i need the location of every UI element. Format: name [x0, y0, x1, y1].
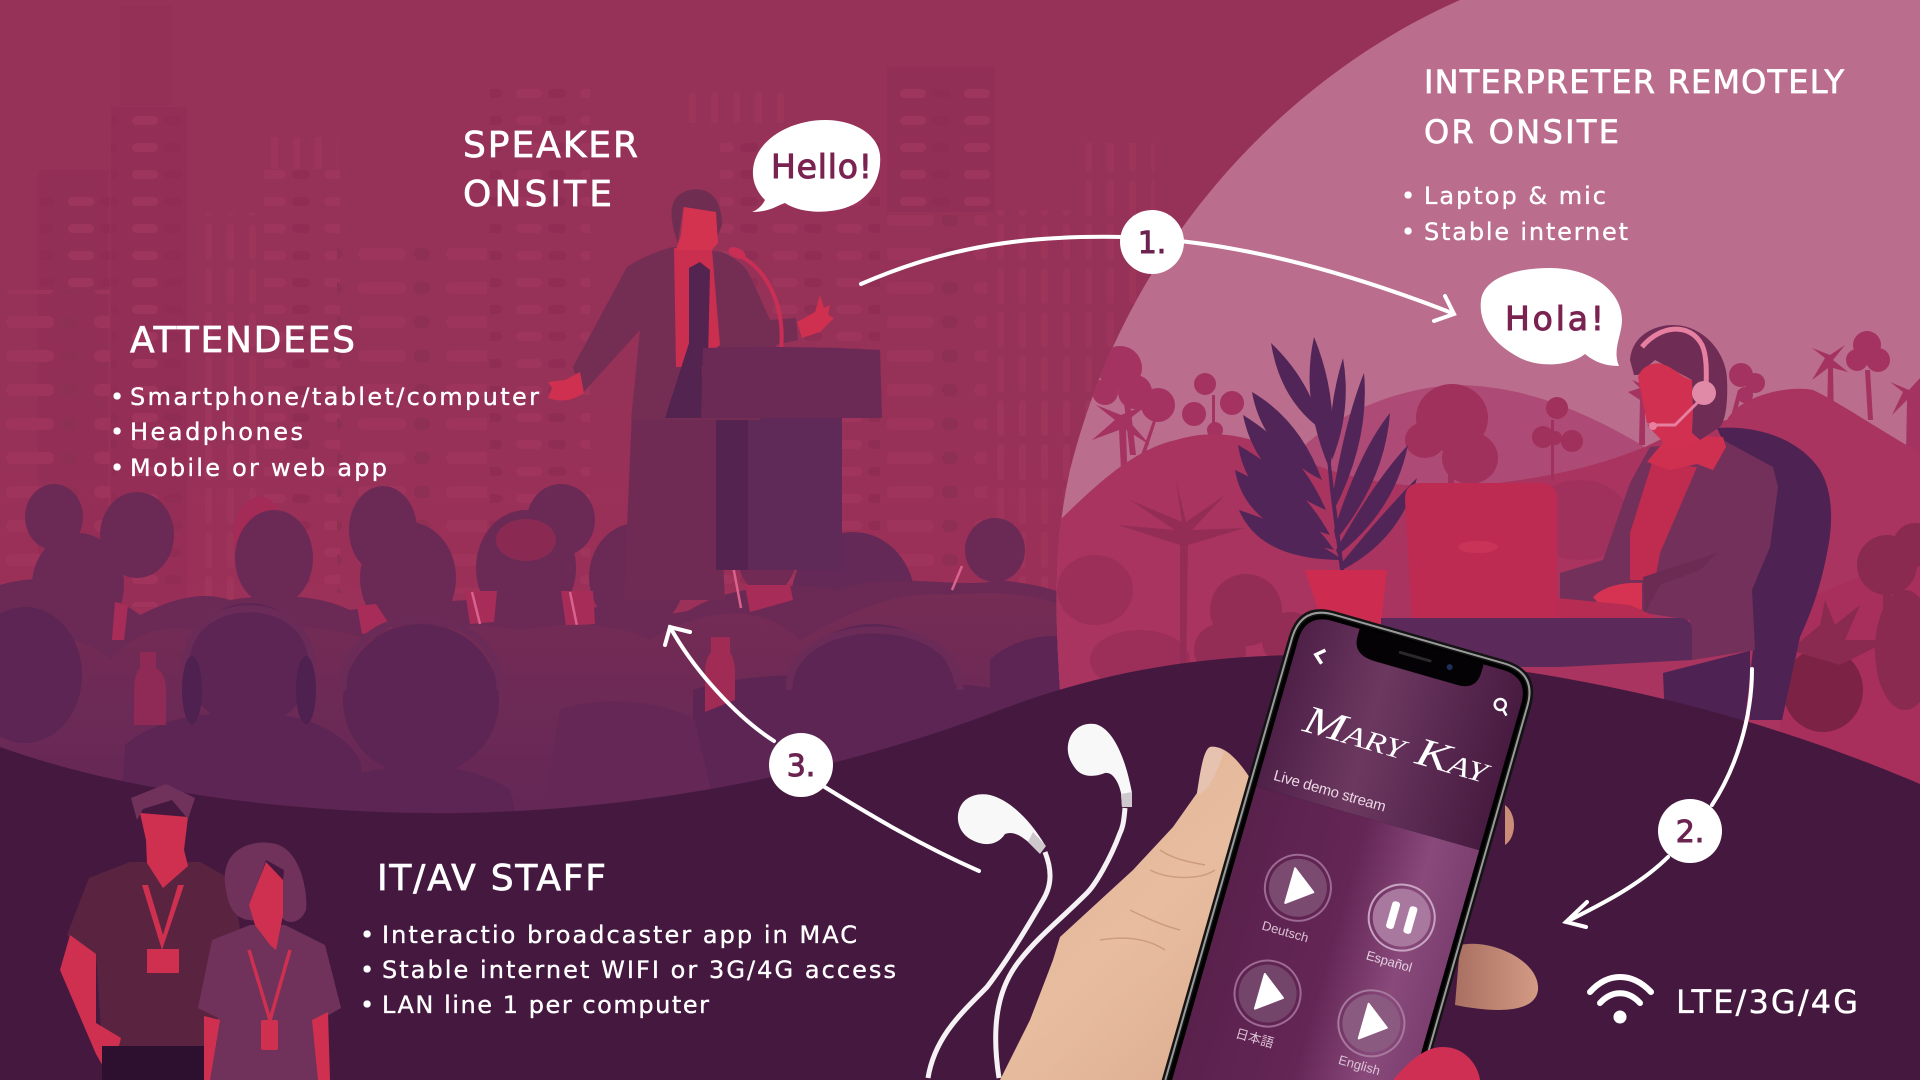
- ferns and lower trees: [1057, 483, 1302, 678]
- speech bubble: Hola: Hola!: [1505, 299, 1604, 338]
- text block: IT/AV staff: •: [360, 956, 374, 984]
- IT/AV staff figures: [60, 784, 341, 1080]
- text block: IT/AV staff: •: [360, 921, 374, 949]
- step number 2: 2.: [1676, 815, 1704, 850]
- pause button: Español: [1355, 877, 1443, 978]
- speech bubble: Hello: [752, 120, 880, 212]
- desk: [1381, 618, 1692, 667]
- label: English: English: [1337, 1052, 1382, 1078]
- arrow 1: speaker to interpreter: [861, 237, 1454, 321]
- distant trees: [1092, 331, 1920, 466]
- text block: attendees: •: [110, 454, 124, 482]
- text block: IT/AV staff: Interactio broadcaster app in MAC: [382, 921, 857, 949]
- heading: speaker onsite: SPEAKER: [463, 125, 638, 166]
- text block: attendees: Smartphone/tablet/computer: [130, 383, 539, 411]
- text block: attendees: Headphones: [130, 418, 303, 446]
- play button: Deutsch: [1252, 847, 1339, 948]
- text block: attendees: [110, 320, 539, 482]
- heading: speaker onsite: ONSITE: [463, 174, 612, 215]
- icon: search: [1493, 698, 1510, 716]
- laptop: [1405, 483, 1557, 619]
- step number 1: 1.: [1138, 226, 1166, 261]
- text block: interpreter: Laptop & mic: [1424, 182, 1606, 210]
- front hills: [1056, 388, 1920, 732]
- icon: wifi: [1590, 977, 1651, 1020]
- text block: IT/AV staff: •: [360, 991, 374, 1019]
- crowd of attendees: [0, 484, 1075, 830]
- water bottles: [134, 637, 735, 725]
- play button: Japanese: [1221, 953, 1308, 1056]
- arrow 3: network to attendees: [665, 627, 979, 871]
- step number 1: [1120, 210, 1184, 274]
- text block: attendees: Mobile or web app: [130, 454, 387, 482]
- step number 3: 3.: [787, 749, 815, 784]
- step number 2: [1658, 799, 1722, 863]
- phone body: [1162, 609, 1533, 1080]
- play button: English: [1331, 982, 1412, 1064]
- text block: interpreter: INTERPRETER REMOTELY: [1424, 63, 1844, 101]
- shirt: [1630, 463, 1697, 580]
- text block: interpreter: [1401, 63, 1844, 246]
- earbuds: [928, 724, 1132, 1078]
- text block: IT/AV staff: LAN line 1 per computer: [382, 991, 709, 1019]
- speech bubble: Hello: Hello!: [771, 147, 872, 186]
- jacket: [1560, 440, 1778, 660]
- chair: [1663, 428, 1831, 720]
- icon: back chevron: [1314, 648, 1325, 664]
- icon: potted plant: [1235, 337, 1417, 625]
- text block: interpreter: •: [1401, 218, 1415, 246]
- play button: Japanese: 日本語: [1234, 1023, 1276, 1052]
- text block: attendees: •: [110, 383, 124, 411]
- hand holding phone: [1000, 747, 1538, 1080]
- text block: attendees: •: [110, 418, 124, 446]
- label: LTE/3G/4G: LTE/3G/4G: [1676, 983, 1858, 1021]
- app logo: Mary Kay: [1298, 696, 1498, 793]
- text block: IT/AV staff: IT/AV STAFF: [377, 858, 606, 899]
- text block: IT/AV staff: Stable internet WIFI or 3G/4G access: [382, 956, 896, 984]
- text block: attendees: ATTENDEES: [130, 320, 355, 361]
- red blob at bottom of phone: [1393, 1047, 1480, 1080]
- panel: interpreter landscape: [1040, 0, 1920, 800]
- interpreter at desk: [1381, 325, 1831, 720]
- pause button: Español: Español: [1365, 948, 1414, 975]
- notch: [1352, 627, 1484, 690]
- arrow 2: interpreter to network: [1566, 669, 1752, 927]
- stream label: Live demo stream: [1272, 767, 1388, 816]
- front row: [0, 603, 1075, 830]
- speaker at podium: [548, 189, 882, 600]
- panel: bottom dark wave: [0, 655, 1920, 1080]
- speech bubble: Hola: [1481, 268, 1622, 366]
- phone screen content: [1231, 615, 1520, 981]
- heading: speaker onsite: [463, 125, 638, 215]
- text block: interpreter: OR ONSITE: [1424, 113, 1619, 151]
- headset: [1642, 329, 1706, 392]
- necks and earphone wires: [112, 585, 922, 640]
- face: [1638, 363, 1700, 449]
- step number 3: [769, 733, 833, 797]
- play button: Deutsch: Deutsch: [1260, 918, 1310, 945]
- text block: interpreter: •: [1401, 182, 1415, 210]
- hair: [1630, 325, 1727, 440]
- text block: IT/AV staff: [360, 858, 896, 1019]
- text block: interpreter: Stable internet: [1424, 218, 1628, 246]
